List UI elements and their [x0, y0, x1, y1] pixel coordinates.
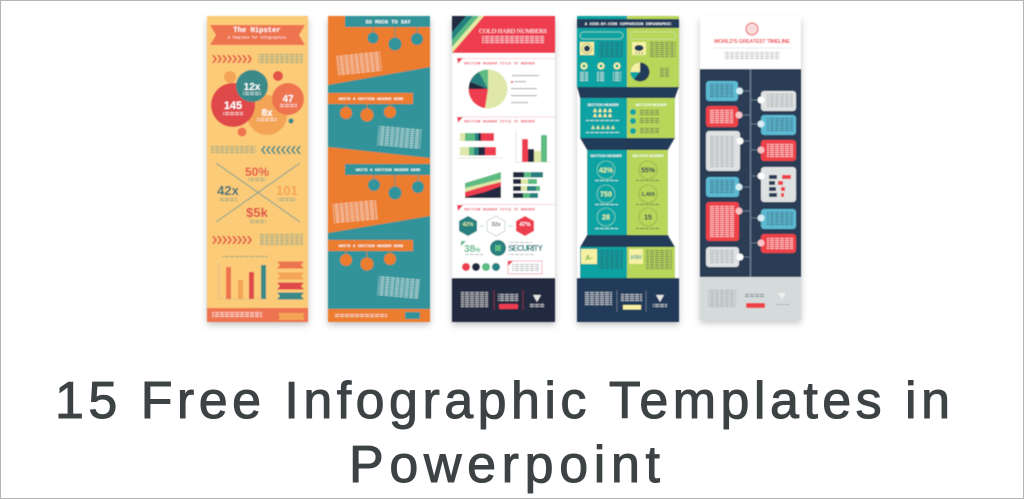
pie legend — [511, 75, 539, 103]
crossed arrows with statistics: $5k — [246, 205, 269, 220]
text blocks — [598, 42, 623, 57]
section 1 backgrounds — [577, 16, 679, 87]
timeline card: gray tall — [706, 131, 744, 171]
navy background — [700, 69, 801, 277]
bubble chart: 12x — [244, 82, 261, 93]
section 2 — [580, 98, 675, 138]
ribbon list — [277, 262, 304, 300]
timeline card: blue — [706, 81, 743, 101]
section heading 3 — [457, 204, 555, 212]
footer — [700, 277, 801, 320]
chevron row 2 — [261, 146, 301, 154]
bar chart — [219, 255, 268, 299]
section 3: SECTION HEADER — [590, 154, 622, 158]
pendant circles 3 — [368, 175, 424, 200]
stacked bar chart — [458, 133, 503, 158]
security statistic — [490, 240, 544, 256]
footer — [335, 312, 420, 319]
section heading 2: SECTION HEADER TITLE IF NEEDED — [464, 120, 536, 124]
bubble chart — [211, 70, 304, 136]
callout box — [508, 261, 542, 274]
section 3: 15 — [644, 214, 652, 222]
fold 3 — [580, 235, 675, 247]
poster 3: Cold Hard Numbers — [452, 16, 555, 322]
text block 1 — [336, 51, 382, 75]
horizontal stacked bars — [513, 172, 543, 198]
security statistic: SECURITY — [508, 244, 544, 253]
38% statistic — [461, 241, 483, 256]
section 4: A- — [585, 255, 593, 262]
heading: section 4: WRITE A SECTION HEADER HERE — [339, 245, 404, 249]
bubble chart: 8x — [261, 108, 273, 119]
crossed arrows with statistics — [216, 163, 300, 224]
text block 2 — [211, 145, 256, 154]
teal slanted section 2 — [328, 216, 430, 309]
hexagon statistics — [459, 216, 534, 236]
footer — [207, 308, 308, 322]
branches — [739, 91, 761, 257]
section 2: SECTION HEADER — [635, 103, 667, 107]
timeline card: red — [706, 106, 742, 127]
poster 2: So Much To Say — [328, 16, 430, 322]
heading: So Much To Say — [345, 16, 430, 27]
section heading 1 — [457, 58, 555, 66]
timeline card: red tall — [706, 202, 742, 241]
text block 4 — [377, 275, 421, 299]
bubble chart: 145 — [224, 100, 242, 112]
timeline card: blue — [758, 115, 796, 135]
title: Powerpoint — [349, 436, 661, 494]
hexagon statistics: 32x — [491, 222, 502, 228]
section 4: A/B0 — [630, 255, 642, 261]
section 3: 1,400 — [641, 192, 655, 198]
text block 1 — [258, 54, 303, 63]
section 2: SECTION HEADER — [587, 103, 619, 107]
crossed arrows with statistics: 42x — [217, 183, 240, 198]
pendant circles 1 — [368, 27, 423, 50]
section 3: 55% — [641, 168, 656, 174]
red header — [452, 16, 555, 53]
section 3 — [587, 150, 668, 235]
column chart — [516, 130, 550, 162]
timeline spine — [750, 69, 752, 277]
poster base — [577, 16, 679, 322]
hexagon statistics: 42% — [462, 222, 474, 228]
pie chart — [630, 62, 670, 82]
poster 1: The Hipster — [207, 16, 308, 322]
banner: The Hipster: A Template for Infographics — [228, 36, 286, 40]
title: 15 Free Infographic Templates in — [55, 372, 950, 430]
heading bar — [577, 19, 679, 28]
pie chart — [468, 70, 508, 108]
banner: The Hipster — [210, 25, 305, 45]
title — [55, 372, 950, 494]
section 4 — [580, 247, 675, 278]
white header: WORLD'S GREATEST TIMELINE — [714, 39, 790, 45]
text block 3 — [259, 234, 303, 246]
section heading 1: SECTION HEADER TITLE IF NEEDED — [464, 62, 536, 66]
heading: section 3 — [345, 164, 430, 175]
timeline card: gray — [758, 91, 796, 111]
comparison pills — [580, 32, 676, 39]
chevron row 3 — [212, 236, 252, 244]
section heading 2 — [457, 117, 555, 124]
heading: section 3: WRITE A SECTION HEADER HERE — [356, 169, 421, 173]
chevron row 1 — [212, 55, 252, 63]
timeline card: blue — [706, 177, 742, 197]
footer — [577, 278, 679, 322]
pendant circles 4 — [340, 251, 396, 270]
teal slanted section 1 — [328, 67, 430, 158]
crossed arrows with statistics: 101 — [276, 183, 298, 198]
area chart — [465, 172, 501, 198]
text block 3 — [332, 200, 378, 224]
38% statistic: 38% — [464, 244, 481, 255]
poster 4: Side by Side Comparison — [577, 16, 679, 322]
footer — [452, 278, 555, 322]
timeline card: red — [758, 140, 796, 161]
white header — [700, 15, 801, 69]
poster shadows — [207, 20, 801, 325]
section heading 3: SECTION HEADER TITLE IF NEEDED — [464, 208, 536, 212]
section 3: 750 — [600, 192, 612, 198]
gauges — [580, 62, 621, 82]
section 3: SECTION HEADER — [632, 154, 664, 158]
icon: sun — [580, 42, 594, 55]
icon: cloud — [632, 42, 646, 55]
heading: section 2: WRITE A SECTION HEADER HERE — [339, 98, 404, 102]
heading bar: A SIDE-BY-SIDE COMPARISON INFOGRAPHIC — [585, 23, 672, 27]
icon circles — [462, 263, 500, 271]
text block 2 — [377, 125, 422, 149]
banner: The Hipster: The Hipster — [233, 27, 281, 35]
section 3: 28 — [602, 214, 610, 222]
timeline card: blue — [758, 209, 796, 229]
heading: section 2 — [328, 93, 413, 104]
heading: section 4 — [328, 240, 413, 251]
timeline card: gray with chart — [758, 167, 796, 202]
pendant circles 2 — [340, 104, 396, 122]
poster 5: World's Greatest Timeline — [700, 15, 801, 320]
crossed arrows with statistics: 50% — [245, 165, 269, 179]
heading: So Much To Say: SO MUCH TO SAY — [365, 20, 411, 26]
section 3: 42% — [599, 168, 614, 174]
red header: COLD HARD NUMBERS — [479, 28, 547, 35]
fold 1 — [577, 87, 679, 98]
bubble chart: 47 — [282, 94, 294, 105]
hexagon statistics: 47% — [519, 222, 531, 228]
timeline card: red — [758, 234, 796, 253]
fold 2 — [580, 138, 675, 150]
timeline card: gray — [706, 247, 744, 267]
